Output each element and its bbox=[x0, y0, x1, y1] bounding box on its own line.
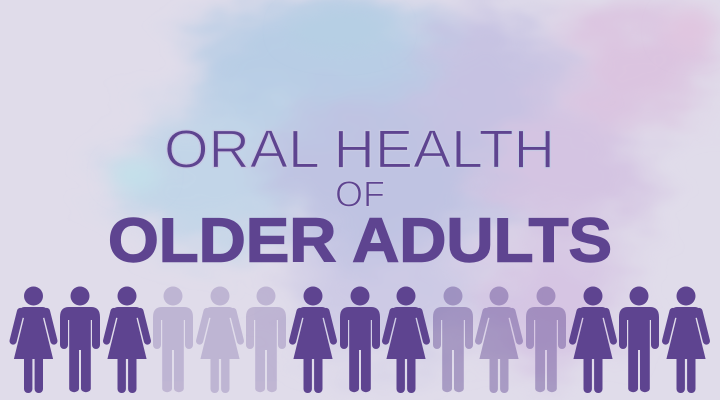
icon: man 4 faded bbox=[153, 286, 193, 392]
title bbox=[108, 120, 612, 276]
icon: man 10 semi-faded bbox=[433, 286, 473, 392]
icon: woman 1 bbox=[13, 286, 54, 393]
icon: man 14 bbox=[619, 286, 659, 392]
icon: man 6 faded bbox=[246, 286, 286, 392]
heading line: OLDER ADULTS: OLDER ADULTS bbox=[108, 206, 612, 276]
icon: man 8 bbox=[340, 286, 380, 392]
icon: woman 13 bbox=[573, 286, 613, 393]
icon: woman 7 bbox=[293, 286, 333, 393]
heading line: ORAL HEALTH: ORAL HEALTH bbox=[164, 120, 555, 180]
icon: man 12 semi-faded bbox=[526, 286, 566, 392]
heading line: OF: OF bbox=[335, 174, 385, 214]
icon: woman 9 bbox=[386, 286, 426, 393]
icon: woman 5 faded bbox=[200, 286, 240, 393]
icon: woman 3 bbox=[107, 286, 147, 393]
row of fifteen people icons bbox=[13, 286, 706, 393]
icon: woman 11 semi-faded bbox=[479, 286, 519, 393]
icon: man 2 bbox=[60, 286, 100, 392]
icon: woman 15 bbox=[666, 286, 706, 393]
